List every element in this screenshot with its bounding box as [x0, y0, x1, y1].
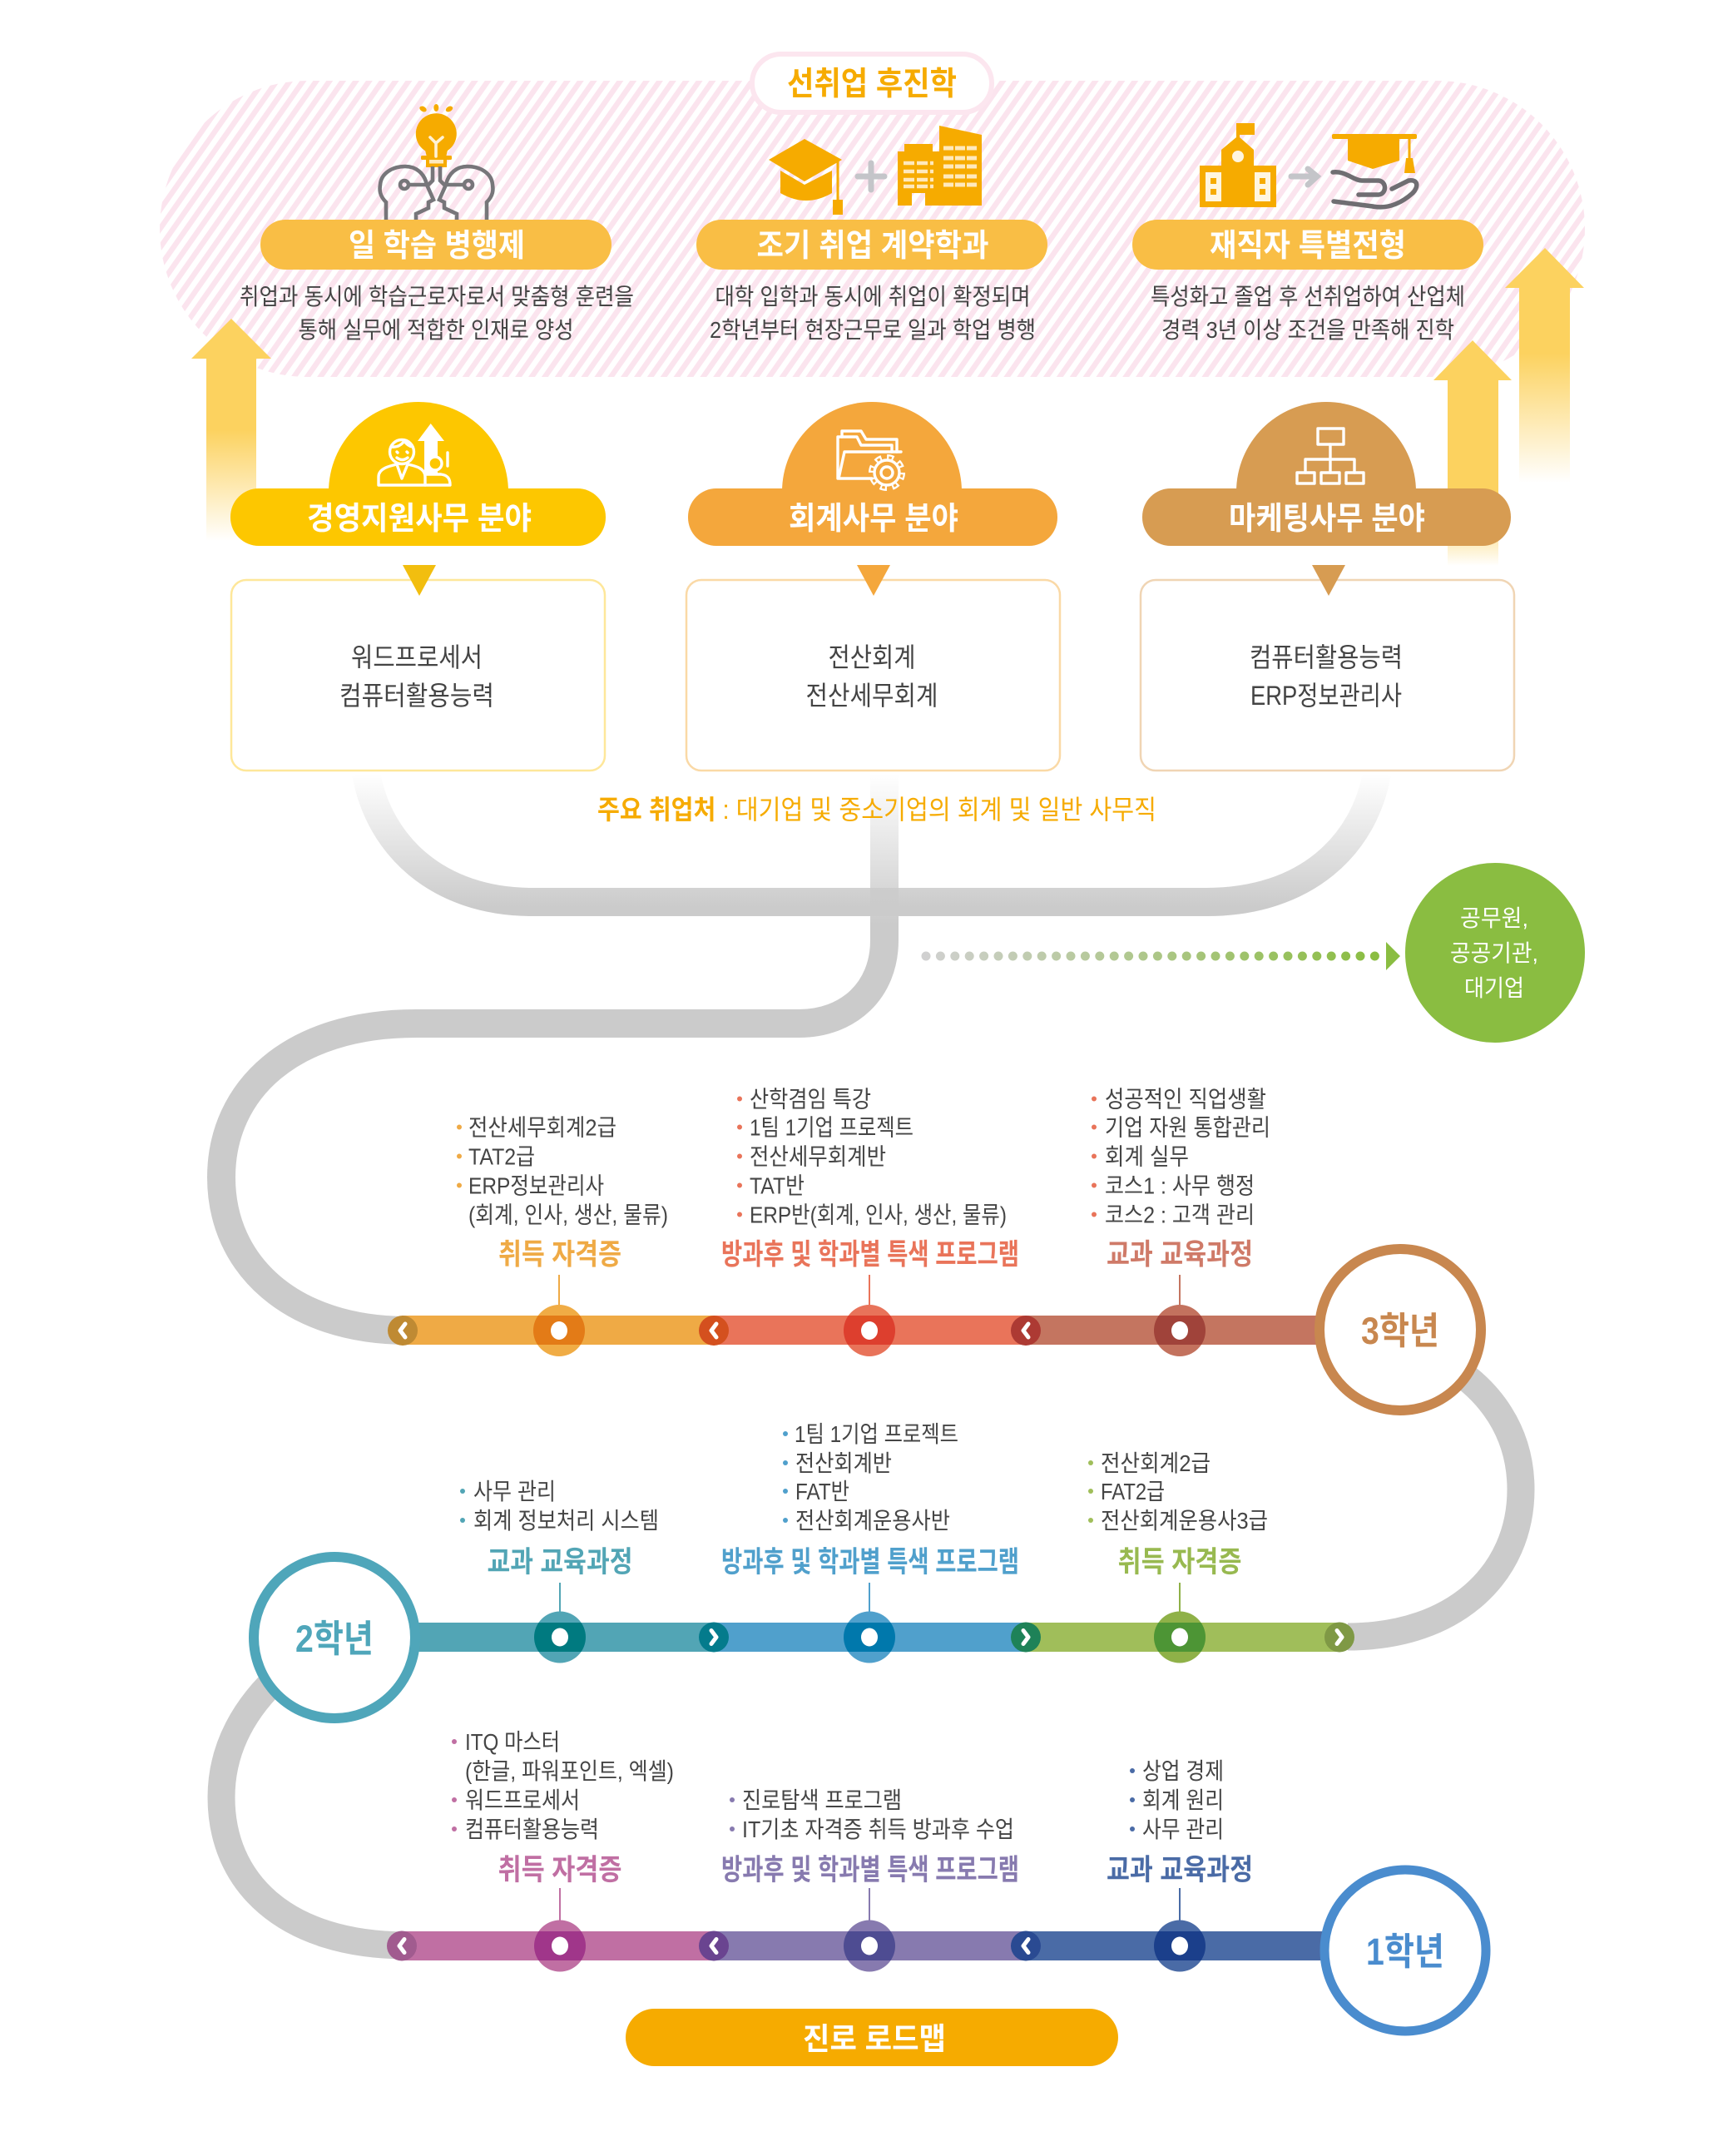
text: third grade certificates: 취득 자격증 [498, 1238, 621, 1271]
icon: person with rising arrow [379, 424, 450, 485]
text: second grade curriculum [460, 1479, 659, 1579]
text: third grade curriculum: 회계 실무 [1105, 1143, 1189, 1170]
panel: early employment contract department: 대학 입학과 동시에 취업이 확정되며 [715, 284, 1030, 310]
timeline: first grade bar [387, 1888, 1334, 1972]
arrow: left rising arrow [191, 319, 271, 541]
text: third grade program: 방과후 및 학과별 특색 프로그램 [721, 1238, 1019, 1271]
text: second grade certificates: 전산회계2급 [1101, 1450, 1211, 1476]
badge: third grade: 3학년 [1361, 1310, 1439, 1352]
panel: public sector circle [1405, 863, 1585, 1043]
panel: public sector circle: 대기업 [1464, 975, 1524, 1001]
panel: employee special admission: 경력 3년 이상 조건을 만족해 진학 [1161, 317, 1454, 343]
stem and node: certificates [1154, 1583, 1206, 1663]
panel: early employment contract department [696, 220, 1047, 343]
text: first grade certificates: (한글, 파워포인트, 엑셀) [465, 1758, 674, 1784]
icon: organization chart [1297, 429, 1364, 483]
text: second grade program: 방과후 및 학과별 특색 프로그램 [721, 1546, 1019, 1579]
text: third grade program: 전산세무회계반 [750, 1143, 886, 1170]
footer: career roadmap pill: 진로 로드맵 [803, 2022, 946, 2056]
stem and node: after-school program [844, 1275, 895, 1356]
panel: employee special admission: 재직자 특별전형 [1210, 229, 1406, 264]
text: main employers: 주요 취업처 : 대기업 및 중소기업의 회계 및 일반 사무직 [597, 795, 1156, 825]
chevrons [699, 1623, 1354, 1653]
text: first grade curriculum: 교과 교육과정 [1107, 1854, 1253, 1886]
icon: folder with gear [838, 431, 902, 488]
text: second grade certificates: 취득 자격증 [1118, 1546, 1241, 1579]
panel: employee special admission: 특성화고 졸업 후 선취업하여 산업체 [1151, 284, 1465, 310]
panel: business support field: 경영지원사무 분야 [307, 502, 532, 537]
arrow: dotted arrow to public sector [926, 942, 1400, 970]
panel: marketing certificates: ERP정보관리사 [1250, 681, 1402, 711]
badge: first grade [1324, 1870, 1486, 2031]
text: third grade program: TAT반 [750, 1173, 805, 1198]
text: third grade certificates [457, 1115, 668, 1271]
text: first grade certificates: 취득 자격증 [498, 1854, 622, 1886]
text: third grade curriculum: 코스1 : 사무 행정 [1105, 1173, 1255, 1198]
badge: first grade: 1학년 [1366, 1930, 1444, 1973]
panel: work-study program [240, 220, 634, 343]
text: first grade program: 방과후 및 학과별 특색 프로그램 [721, 1854, 1019, 1886]
text: first grade certificates [452, 1729, 674, 1886]
timeline: third grade bar [388, 1275, 1334, 1356]
text: third grade certificates: 전산세무회계2급 [468, 1115, 616, 1140]
connector: grey curve from second to first grade [221, 1673, 408, 1945]
panel: work-study program: 일 학습 병행제 [349, 229, 525, 264]
text: third grade program: 1팀 1기업 프로젝트 [750, 1115, 913, 1140]
panel: accounting field [688, 402, 1057, 546]
stem and node: certificates [533, 1275, 585, 1356]
text: third grade curriculum [1092, 1087, 1270, 1271]
panel: early employment background [160, 81, 1585, 377]
arrow: triangle under accounting [857, 565, 890, 596]
stem and node: certificates [534, 1888, 586, 1972]
panel: marketing certificates [1141, 580, 1514, 771]
arrow: far right rising arrow [1505, 248, 1584, 483]
text: second grade program [721, 1421, 1019, 1579]
badge: second grade [254, 1557, 415, 1718]
text: second grade program: 전산회계반 [795, 1450, 892, 1476]
text: third grade program: ERP반(회계, 인사, 생산, 물류) [750, 1202, 1007, 1228]
panel: public sector circle: 공무원, [1460, 905, 1528, 931]
text: second grade curriculum: 회계 정보처리 시스템 [473, 1508, 659, 1534]
panel: early employment contract department: 조기 취업 계약학과 [757, 229, 988, 264]
text: third grade program [721, 1087, 1019, 1271]
text: second grade certificates: 전산회계운용사3급 [1101, 1508, 1268, 1534]
panel: business support certificates [231, 580, 605, 771]
text: third grade curriculum: 기업 자원 통합관리 [1105, 1115, 1270, 1140]
text: third grade curriculum: 성공적인 직업생활 [1105, 1087, 1266, 1112]
stem and node: curriculum [534, 1583, 586, 1663]
connector: grey branch merging fields [221, 773, 1377, 1331]
text: second grade curriculum: 교과 교육과정 [488, 1546, 632, 1579]
panel: marketing certificates: 컴퓨터활용능력 [1250, 642, 1403, 672]
panel: business support certificates: 워드프로세서 [351, 642, 483, 672]
chevrons [387, 1930, 1041, 1960]
text: second grade certificates [1088, 1450, 1268, 1579]
text: third grade certificates: ERP정보관리사 [468, 1173, 604, 1198]
icon: school arrow and diploma hand [1200, 123, 1417, 207]
arrow: middle right rising arrow [1433, 340, 1512, 566]
text: first grade program: IT기초 자격증 취득 방과후 수업 [742, 1816, 1014, 1842]
text: first grade certificates: 컴퓨터활용능력 [465, 1816, 599, 1842]
text: second grade program: 전산회계운용사반 [795, 1508, 950, 1534]
text: second grade certificates: FAT2급 [1101, 1479, 1165, 1504]
text: third grade curriculum: 코스2 : 고객 관리 [1105, 1202, 1255, 1228]
connector: grey curve from third to second grade [1348, 1365, 1521, 1637]
footer: career roadmap pill [626, 2009, 1118, 2066]
panel: accounting certificates [686, 580, 1060, 771]
text: first grade curriculum: 사무 관리 [1142, 1816, 1224, 1842]
stem and node: curriculum [1154, 1275, 1206, 1356]
panel: work-study program: 통해 실무에 적합한 인재로 양성 [298, 317, 574, 343]
panel: accounting certificates: 전산회계 [829, 642, 915, 672]
panel: public sector circle: 공공기관, [1450, 940, 1538, 966]
heading: early employment title [752, 54, 992, 112]
icon: light bulb and heads [380, 104, 493, 221]
panel: business support field [230, 402, 606, 546]
heading: early employment title: 선취업 후진학 [787, 67, 957, 102]
text: first grade program: 진로탐색 프로그램 [742, 1787, 902, 1813]
text: third grade certificates: (회계, 인사, 생산, 물류) [468, 1202, 668, 1228]
text: first grade certificates: 워드프로세서 [465, 1787, 580, 1813]
text: second grade curriculum: 사무 관리 [473, 1479, 556, 1504]
panel: work-study program: 취업과 동시에 학습근로자로서 맞춤형 훈련을 [240, 284, 634, 310]
panel: employee special admission [1132, 220, 1483, 343]
stem and node: curriculum [1154, 1888, 1206, 1972]
text: first grade curriculum [1107, 1758, 1253, 1886]
panel: business support certificates: 컴퓨터활용능력 [339, 681, 494, 711]
text: first grade curriculum: 상업 경제 [1142, 1758, 1224, 1784]
panel: accounting field: 회계사무 분야 [789, 502, 958, 537]
panel: marketing field: 마케팅사무 분야 [1229, 502, 1425, 537]
panel: marketing field [1142, 402, 1511, 546]
text: third grade curriculum: 교과 교육과정 [1107, 1238, 1253, 1271]
text: first grade program [721, 1787, 1019, 1886]
timeline: second grade bar [366, 1583, 1354, 1663]
text: first grade certificates: ITQ 마스터 [465, 1729, 560, 1755]
text: third grade program: 산학겸임 특강 [750, 1087, 871, 1112]
arrow: triangle under marketing [1312, 565, 1345, 596]
text: third grade certificates: TAT2급 [468, 1143, 535, 1170]
badge: second grade: 2학년 [295, 1618, 374, 1660]
stem and node: after-school program [844, 1583, 895, 1663]
text: second grade program: 1팀 1기업 프로젝트 [795, 1421, 958, 1447]
icon: mortarboard plus building [769, 126, 982, 215]
text: second grade program: FAT반 [795, 1479, 849, 1504]
text: first grade curriculum: 회계 원리 [1142, 1787, 1224, 1813]
arrow: triangle under business support [403, 565, 436, 596]
badge: third grade [1319, 1249, 1481, 1410]
panel: accounting certificates: 전산세무회계 [805, 681, 938, 711]
stem and node: after-school program [844, 1888, 895, 1972]
chevrons [388, 1316, 1041, 1346]
panel: early employment contract department: 2학년부터 현장근무로 일과 학업 병행 [710, 317, 1036, 343]
